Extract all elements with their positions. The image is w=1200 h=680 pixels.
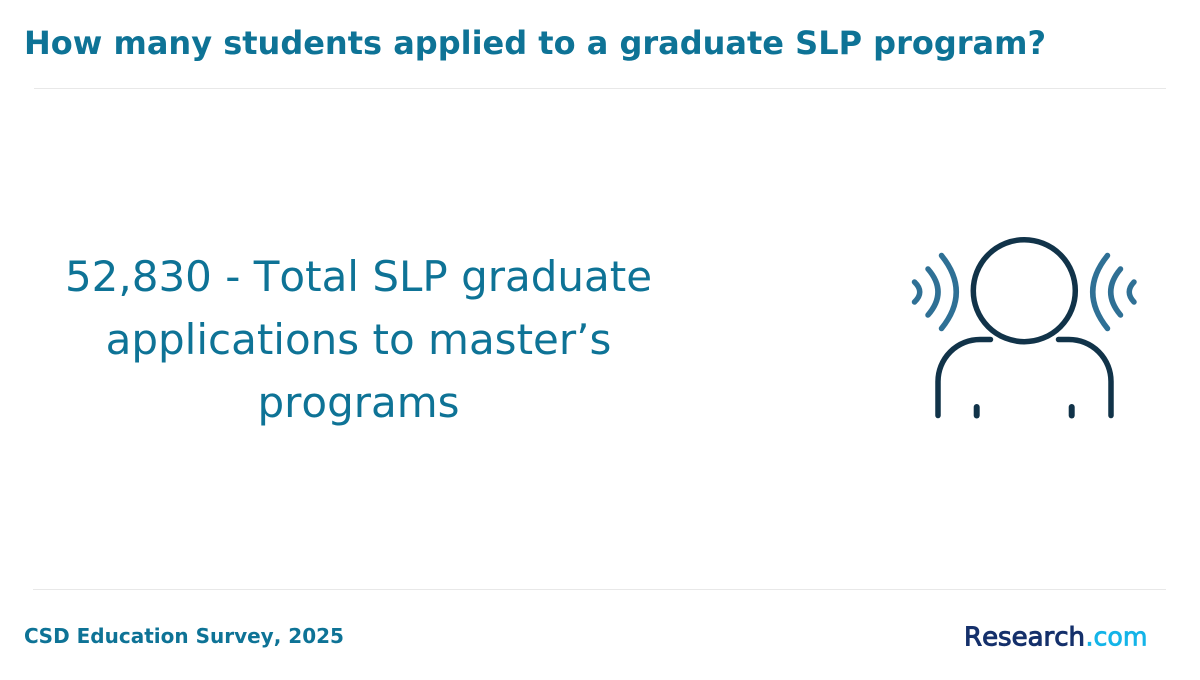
main statement	[65, 252, 652, 427]
title: How many students applied to a graduate SLP program?	[24, 24, 1046, 62]
main statement: 52,830 - Total SLP graduate	[65, 252, 652, 301]
logo: .com	[1086, 622, 1148, 652]
icon: person with sound waves	[912, 237, 1137, 418]
main statement: programs	[257, 378, 460, 427]
icon: sound waves	[914, 256, 1134, 328]
icon: person	[938, 240, 1111, 416]
logo	[964, 622, 1148, 652]
logo: Research	[964, 622, 1085, 652]
source: CSD Education Survey, 2025	[24, 624, 344, 648]
main statement: applications to master’s	[106, 315, 611, 364]
